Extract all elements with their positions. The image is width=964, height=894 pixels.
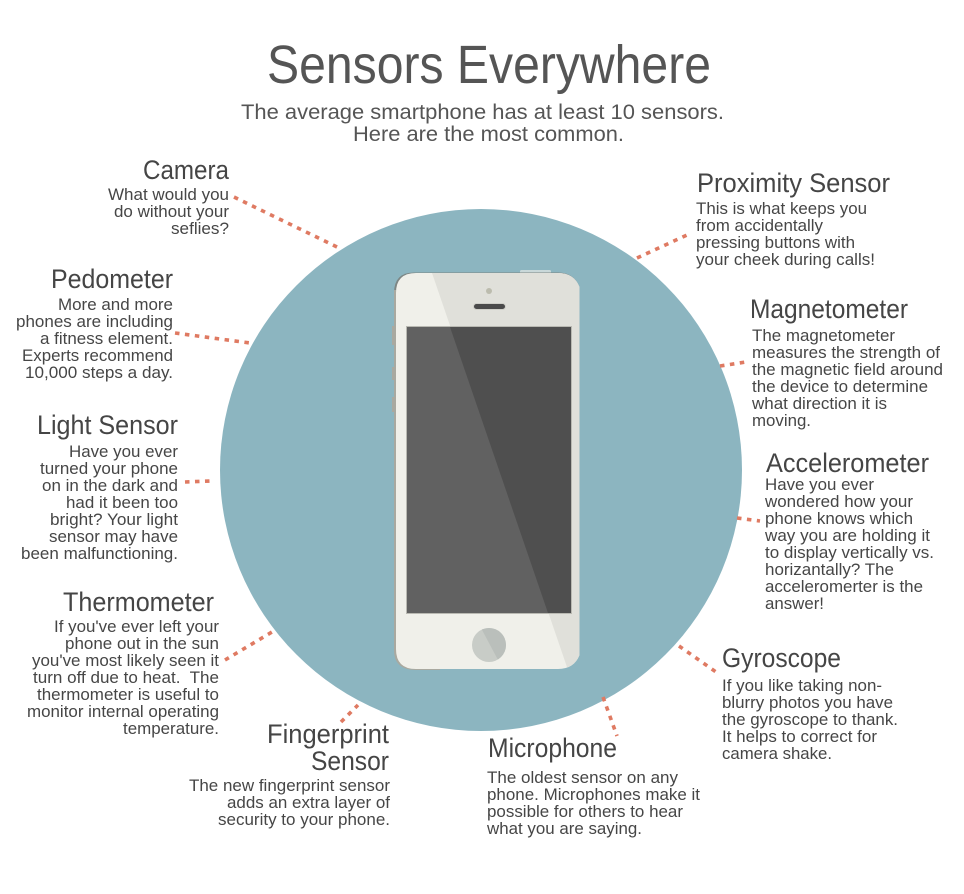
panel: camera: Camera	[143, 155, 230, 185]
panel: thermometer: temperature.	[123, 719, 219, 738]
panel: camera: seflies?	[171, 219, 229, 238]
panel: thermometer: Thermometer	[63, 587, 214, 617]
panel: light sensor: turned your phone	[40, 459, 178, 478]
panel: thermometer: monitor internal operating	[27, 702, 219, 721]
panel: magnetometer: moving.	[752, 411, 811, 430]
panel: microphone: what you are saying.	[486, 819, 642, 838]
panel: thermometer: turn off due to heat. The	[33, 668, 219, 687]
panel: fingerprint sensor: adds an extra layer of	[227, 793, 390, 812]
panel: camera: What would you	[108, 185, 229, 204]
panel: accelerometer: answer!	[765, 594, 824, 613]
panel: gyroscope: blurry photos you have	[722, 693, 893, 712]
panel: light sensor: been malfunctioning.	[21, 544, 178, 563]
panel: microphone	[486, 733, 700, 838]
panel: light sensor	[21, 410, 178, 563]
panel: pedometer: More and more	[58, 295, 173, 314]
panel: pedometer: phones are including	[16, 312, 173, 331]
connector: magnetometer	[720, 362, 746, 366]
subtitle: Here are the most common.	[353, 123, 624, 146]
panel: microphone: possible for others to hear	[487, 802, 683, 821]
panel: light sensor: Light Sensor	[37, 410, 178, 440]
panel: gyroscope: camera shake.	[722, 744, 832, 763]
panel: accelerometer: way you are holding it	[764, 526, 930, 545]
panel: pedometer: 10,000 steps a day.	[25, 363, 173, 382]
panel: light sensor: sensor may have	[49, 527, 178, 546]
subtitle: The average smartphone has at least 10 sensors.	[241, 101, 724, 124]
panel: accelerometer: Accelerometer	[766, 448, 929, 478]
panel: proximity sensor	[696, 168, 890, 269]
title: Sensors Everywhere	[267, 35, 711, 95]
panel: camera	[108, 155, 230, 238]
panel: thermometer: phone out in the sun	[65, 634, 219, 653]
panel: fingerprint sensor	[189, 719, 390, 829]
panel: magnetometer: The magnetometer	[752, 326, 895, 345]
panel: pedometer: Experts recommend	[22, 346, 173, 365]
panel: pedometer: Pedometer	[51, 264, 173, 294]
panel: fingerprint sensor: The new fingerprint sensor	[189, 776, 390, 795]
connector: microphone	[603, 697, 617, 736]
panel: gyroscope: It helps to correct for	[722, 727, 877, 746]
icon: smartphone	[392, 270, 581, 670]
panel: magnetometer	[750, 294, 943, 430]
panel: accelerometer: horizantally? The	[765, 560, 894, 579]
panel: light sensor: on in the dark and	[42, 476, 178, 495]
panel: light sensor: Have you ever	[69, 442, 178, 461]
panel: proximity sensor: pressing buttons with	[696, 233, 855, 252]
panel: thermometer	[27, 587, 219, 738]
panel: magnetometer: what direction it is	[751, 394, 887, 413]
panel: gyroscope: Gyroscope	[722, 643, 841, 673]
panel: microphone: The oldest sensor on any	[487, 768, 679, 787]
panel: microphone: Microphone	[488, 733, 617, 763]
panel: accelerometer: acceleromerter is the	[765, 577, 923, 596]
panel: proximity sensor: This is what keeps you	[696, 199, 867, 218]
panel: thermometer: thermometer is useful to	[37, 685, 219, 704]
panel: gyroscope: If you like taking non-	[722, 676, 882, 695]
panel: accelerometer: to display vertically vs.	[765, 543, 934, 562]
panel: pedometer	[16, 264, 173, 382]
panel: camera: do without your	[114, 202, 229, 221]
connector: accelerometer	[737, 518, 760, 521]
connector: light sensor	[185, 481, 210, 482]
panel: magnetometer: Magnetometer	[750, 294, 908, 324]
connector: pedometer	[175, 333, 250, 343]
panel: fingerprint sensor: Sensor	[311, 746, 389, 776]
panel: gyroscope: the gyroscope to thank.	[722, 710, 898, 729]
panel: gyroscope	[722, 643, 898, 763]
teal circle	[220, 209, 742, 731]
panel: proximity sensor: Proximity Sensor	[697, 168, 890, 198]
panel: pedometer: a fitness element.	[40, 329, 173, 348]
panel: magnetometer: measures the strength of	[752, 343, 940, 362]
panel: accelerometer: Have you ever	[765, 475, 874, 494]
panel: magnetometer: the device to determine	[752, 377, 928, 396]
panel: proximity sensor: your cheek during calls!	[696, 250, 875, 269]
panel: magnetometer: the magnetic field around	[752, 360, 943, 379]
phone screen	[406, 326, 572, 614]
front camera	[486, 288, 492, 294]
connector: camera	[234, 197, 337, 247]
home button	[472, 628, 506, 662]
panel: light sensor: bright? Your light	[50, 510, 178, 529]
connector: gyroscope	[679, 646, 716, 672]
panel: fingerprint sensor: Fingerprint	[267, 719, 389, 749]
panel: thermometer: If you've ever left your	[54, 617, 219, 636]
panel: fingerprint sensor: security to your phone.	[218, 810, 390, 829]
panel: accelerometer	[764, 448, 934, 613]
connector: fingerprint	[341, 705, 358, 722]
panel: microphone: phone. Microphones make it	[487, 785, 700, 804]
connector: proximity	[637, 235, 687, 258]
subtitle	[241, 101, 724, 146]
panel: proximity sensor: from accidentally	[696, 216, 824, 235]
panel: light sensor: had it been too	[66, 493, 178, 512]
panel: thermometer: you've most likely seen it	[32, 651, 219, 670]
connector: thermometer	[225, 632, 272, 660]
panel: accelerometer: phone knows which	[765, 509, 913, 528]
speaker	[474, 304, 506, 310]
panel: accelerometer: wondered how your	[764, 492, 913, 511]
